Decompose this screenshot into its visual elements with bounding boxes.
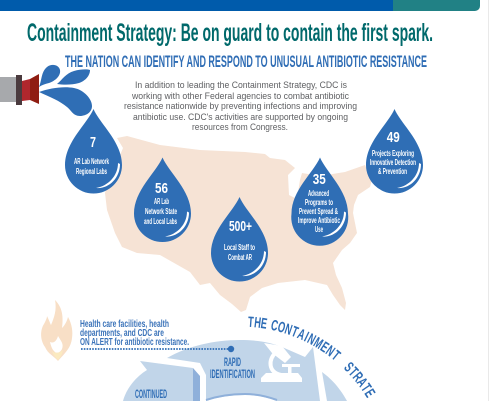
drop: 500+ local staff: 500+: [229, 218, 252, 235]
curved heading: H: [253, 314, 262, 331]
label: rapid identification: RAPID: [224, 357, 241, 369]
curved heading: A: [295, 325, 308, 344]
alert text: ON ALERT for antibiotic resistance.: [80, 336, 189, 348]
segment: continued: [123, 361, 193, 401]
hose nozzle icon: [0, 74, 39, 105]
drop: 56 state and local labs: [134, 158, 191, 242]
drop: 49 projects: Projects Exploring: [372, 149, 414, 158]
curved heading: N: [283, 320, 294, 339]
connector dotted line: [81, 346, 234, 352]
curved heading: N: [323, 342, 338, 360]
drop: 35 advanced programs: Improve Antibiotic: [298, 216, 340, 225]
intro text block: [124, 80, 357, 133]
curved heading: T: [247, 314, 254, 331]
curved heading: R: [349, 369, 366, 385]
icon: flame: [41, 300, 72, 361]
drop: 56 state and local labs: and Local Labs: [144, 217, 177, 226]
curved heading: M: [311, 334, 326, 352]
alert text: departments, and CDC are: [80, 327, 164, 339]
curved heading: I: [302, 329, 311, 345]
curved heading: O: [276, 318, 287, 337]
drop: 35 advanced programs: [291, 158, 348, 246]
drop: 500+ local staff: Combat AR: [228, 253, 252, 262]
curved heading: E: [260, 315, 268, 332]
drop: 35 advanced programs: Advanced: [308, 189, 329, 198]
drop: 49 projects: Innovative Detection: [370, 158, 416, 167]
intro text block: antibiotic use. CDC's activities are supported by ongoing: [133, 112, 348, 123]
intro text block: resources from Congress.: [192, 122, 288, 133]
segment: right: [322, 372, 347, 401]
intro text block: working with other Federal agencies to combat antibiotic: [131, 91, 349, 102]
curved heading: S: [341, 359, 357, 375]
drop: 56 state and local labs: 56: [155, 180, 168, 197]
US map: [105, 136, 372, 312]
page edge: [488, 0, 489, 401]
curved heading: N: [305, 330, 318, 348]
segment: rapid identification: [167, 340, 320, 401]
drop: 7 regional labs: [65, 109, 122, 194]
drop: 35 advanced programs: Prevent Spread &: [299, 207, 338, 216]
drop: 49 projects: 49: [387, 129, 400, 146]
drop: 56 state and local labs: AR Lab: [154, 197, 169, 206]
curved heading: E: [361, 386, 379, 400]
label: rapid identification: [210, 357, 255, 381]
drop: 35 advanced programs: Use: [315, 225, 323, 234]
curved heading: T: [329, 347, 344, 364]
curved heading: [247, 314, 379, 400]
drop: 35 advanced programs: 35: [313, 171, 326, 188]
drop: 500+ local staff: [211, 197, 268, 282]
drop: 56 state and local labs: Network State: [145, 207, 177, 216]
drop: 7 regional labs: 7: [90, 134, 96, 151]
containment cycle diagram: [123, 340, 347, 401]
intro text block: resistance nationwide by preventing infections and improving: [124, 101, 357, 112]
segment fold: [193, 368, 200, 401]
alert text: [80, 318, 189, 348]
water splashes: [39, 65, 92, 116]
alert text: Health care facilities, health: [80, 318, 169, 330]
inner ring edge: [206, 394, 277, 400]
curved heading: T: [345, 364, 362, 380]
text: IDENTIFICATION: [210, 369, 255, 381]
drop: 35 advanced programs: Programs to: [305, 198, 333, 207]
drop: 7 regional labs: Regional Labs: [76, 167, 107, 176]
drop: 500+ local staff: Local Staff to: [224, 243, 255, 252]
curved heading: T: [358, 381, 375, 395]
drop: 7 regional labs: AR Lab Network: [74, 157, 109, 166]
curved heading: E: [317, 338, 332, 356]
drop: 49 projects: [366, 109, 423, 194]
icon: microscope: [261, 343, 302, 382]
top banner bar: [0, 0, 480, 11]
text: CONTINUED: [135, 389, 167, 401]
drop: 49 projects: & Prevention: [378, 167, 407, 176]
curved heading: T: [289, 323, 301, 341]
intro text block: In addition to leading the Containment Strategy, CDC is: [135, 80, 347, 91]
curved heading: A: [353, 375, 371, 390]
curved heading: C: [269, 317, 280, 335]
